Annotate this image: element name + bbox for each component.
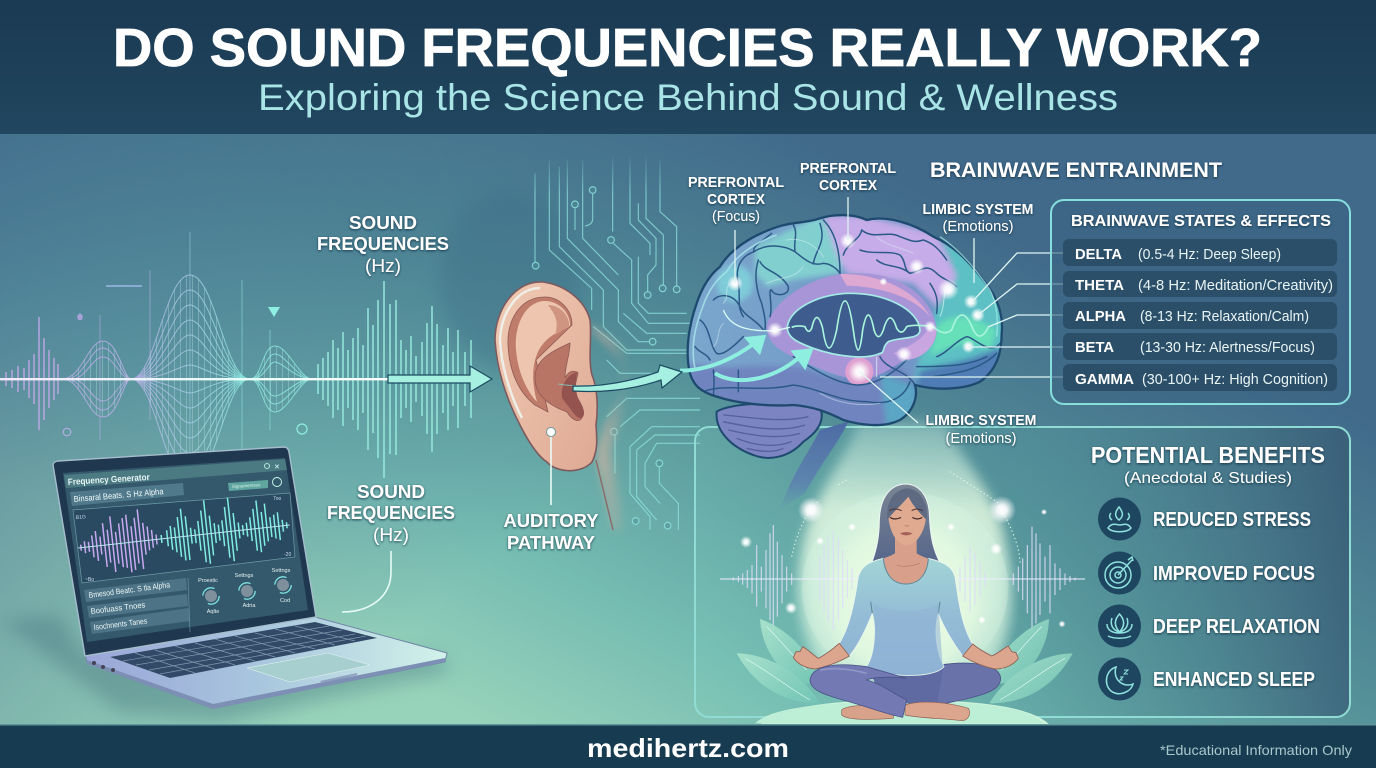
title bar: Signamentsus xyxy=(232,482,261,489)
circuit traces xyxy=(532,157,700,530)
preset rows xyxy=(84,578,190,634)
orbit lines xyxy=(792,472,1020,563)
website: medihertz.com xyxy=(587,733,789,763)
concha xyxy=(535,343,583,421)
row: alpha: ALPHA xyxy=(1075,308,1126,325)
dropdown: Binsaral Beats. S Hz Alpha xyxy=(73,486,164,504)
laptop base xyxy=(85,617,447,708)
title bar xyxy=(64,459,287,491)
laptop xyxy=(53,447,447,709)
arrow: sound wave to ear xyxy=(388,366,492,392)
side sound bars xyxy=(733,525,1075,630)
benefit: enhanced sleep xyxy=(1098,658,1315,700)
laptop screen lid xyxy=(53,447,316,656)
label: limbic system top xyxy=(922,201,1034,235)
row: gamma: GAMMA xyxy=(1075,371,1134,388)
neck and chest xyxy=(883,537,928,584)
callout line to laptop xyxy=(342,551,391,612)
benefit: reduced stress xyxy=(1098,498,1311,540)
waveform display: 7oo xyxy=(273,496,282,502)
title bar: ✕ xyxy=(274,464,280,471)
heading: potential benefits: (Anecdotal & Studies) xyxy=(1124,470,1292,487)
feet xyxy=(842,705,893,719)
left leg front xyxy=(810,665,907,717)
helix rim xyxy=(508,297,572,412)
row: delta: DELTA xyxy=(1075,246,1122,263)
label: limbic system top: LIMBIC SYSTEM xyxy=(922,201,1034,218)
benefit: deep relaxation: DEEP RELAXATION xyxy=(1153,616,1320,638)
preset rows: Bmesod Beatc. S tla Alpha xyxy=(88,580,171,600)
sparks around woman xyxy=(740,496,1066,628)
knobs: Proestic xyxy=(198,578,218,584)
ear xyxy=(495,282,630,530)
left hand xyxy=(793,643,849,669)
light beam and glow xyxy=(760,422,1050,725)
knobs: Adria xyxy=(243,603,256,609)
benefits panel backdrop xyxy=(695,427,1350,717)
knobs: Settngs xyxy=(235,573,254,579)
row: gamma xyxy=(1063,364,1337,391)
folds xyxy=(695,220,1000,403)
title bar: Frequency Generator xyxy=(68,472,150,487)
face xyxy=(888,495,926,545)
label: prefrontal cortex focus: PREFRONTAL xyxy=(688,174,784,191)
ground mound xyxy=(755,702,1043,723)
waveform display: ~Bo xyxy=(85,577,94,583)
cerebellum xyxy=(717,403,822,458)
arrows into brain xyxy=(680,335,813,380)
preset rows: Isochnents Tanes xyxy=(93,616,148,632)
footer band xyxy=(0,724,1376,768)
label: prefrontal cortex: PREFRONTAL xyxy=(800,160,896,177)
row: beta xyxy=(1063,333,1337,360)
icon: moon xyxy=(1098,658,1141,700)
label: limbic system bottom xyxy=(926,412,1036,447)
row: gamma: (30-100+ Hz: High Cognition) xyxy=(1142,371,1328,388)
laptop shadow xyxy=(0,615,450,722)
label: auditory pathway xyxy=(504,511,598,553)
right leg back xyxy=(900,663,1001,706)
label: prefrontal cortex xyxy=(800,160,896,194)
preset rows: Boofuass Tnoes xyxy=(90,600,146,616)
lap xyxy=(867,665,944,705)
facial features xyxy=(889,509,923,511)
heading: potential benefits: POTENTIAL BENEFITS xyxy=(1091,442,1325,468)
knobs: Aqlte xyxy=(207,609,219,615)
waveform display: B1G xyxy=(76,514,86,521)
keyboard xyxy=(110,622,377,678)
label: sound frequencies lower: (Hz) xyxy=(373,525,409,545)
inner oval xyxy=(787,293,920,357)
disclaimer: *Educational Information Only xyxy=(1160,742,1352,758)
label: sound frequencies lower: SOUND xyxy=(357,482,425,502)
benefit: deep relaxation xyxy=(1098,604,1320,648)
row: delta xyxy=(1063,239,1337,266)
screen display xyxy=(63,458,308,642)
panel: brainwave states xyxy=(1051,200,1350,404)
row: delta: (0.5-4 Hz: Deep Sleep) xyxy=(1138,246,1281,263)
label: prefrontal cortex focus: (Focus) xyxy=(712,208,760,225)
label: sound frequencies top: (Hz) xyxy=(365,256,401,276)
panel heading: BRAINWAVE STATES & EFFECTS xyxy=(1071,213,1331,230)
title: DO SOUND FREQUENCIES REALLY WORK? xyxy=(113,18,1262,78)
label: limbic system top: (Emotions) xyxy=(942,218,1014,235)
label: sound frequencies top: SOUND xyxy=(349,213,417,233)
antihelix xyxy=(516,301,570,402)
icon: target xyxy=(1098,552,1141,594)
skin behind ear xyxy=(585,322,630,530)
label: prefrontal cortex focus: CORTEX xyxy=(707,191,765,208)
limbic band xyxy=(767,273,937,380)
icon: lotus xyxy=(1098,604,1141,648)
cerebrum xyxy=(688,215,1002,425)
heading: brainwave entrainment: BRAINWAVE ENTRAINMENT xyxy=(930,159,1222,182)
benefit: enhanced sleep: ENHANCED SLEEP xyxy=(1153,669,1315,691)
icon: drop and lotus xyxy=(1098,498,1141,540)
sound wave xyxy=(0,230,490,490)
waveform display: -20 xyxy=(284,552,291,558)
nodes xyxy=(727,233,985,383)
meditating woman scene xyxy=(720,472,1085,723)
label: sound frequencies top xyxy=(317,213,449,276)
benefit: improved focus xyxy=(1098,552,1315,594)
label: limbic system bottom: (Emotions) xyxy=(946,430,1016,447)
brainstem xyxy=(779,422,848,510)
heading: potential benefits xyxy=(1091,442,1325,487)
label: auditory pathway: AUDITORY xyxy=(504,511,598,531)
label line: auditory pathway xyxy=(546,428,556,505)
benefit: improved focus: IMPROVED FOCUS xyxy=(1153,563,1315,585)
row: theta: (4-8 Hz: Meditation/Creativity) xyxy=(1138,277,1333,294)
brainwave trace xyxy=(792,301,988,350)
row: beta: (13-30 Hz: Alertness/Focus) xyxy=(1140,339,1315,356)
waveform display xyxy=(73,491,295,583)
row: alpha xyxy=(1063,302,1337,329)
hair xyxy=(872,484,940,563)
subtitle: Exploring the Science Behind Sound & Wellness xyxy=(258,77,1118,118)
row: alpha: (8-13 Hz: Relaxation/Calm) xyxy=(1140,308,1309,325)
brain xyxy=(680,215,1013,510)
benefit: reduced stress: REDUCED STRESS xyxy=(1153,509,1311,531)
knobs: Cod xyxy=(280,598,290,604)
row: beta: BETA xyxy=(1075,339,1114,356)
connector lines xyxy=(735,197,1063,423)
arrow: ear to brain xyxy=(558,365,682,392)
label: auditory pathway: PATHWAY xyxy=(507,533,595,553)
label: limbic system bottom: LIMBIC SYSTEM xyxy=(926,412,1036,429)
label: sound frequencies lower: FREQUENCIES xyxy=(327,503,455,523)
torso and sleeves xyxy=(839,558,973,675)
label: prefrontal cortex focus xyxy=(688,174,784,225)
label: sound frequencies top: FREQUENCIES xyxy=(317,234,449,254)
hair front xyxy=(887,488,927,520)
header band xyxy=(0,0,1376,134)
trackpad xyxy=(247,653,370,682)
outer ear xyxy=(495,282,597,471)
right hand xyxy=(963,644,1018,669)
label: sound frequencies lower xyxy=(327,482,455,545)
label: prefrontal cortex: CORTEX xyxy=(819,177,877,194)
row: theta: THETA xyxy=(1075,277,1124,294)
knobs: Settngs xyxy=(272,568,291,574)
knobs xyxy=(188,568,291,632)
row: theta xyxy=(1063,271,1337,297)
leaves xyxy=(737,619,1073,703)
